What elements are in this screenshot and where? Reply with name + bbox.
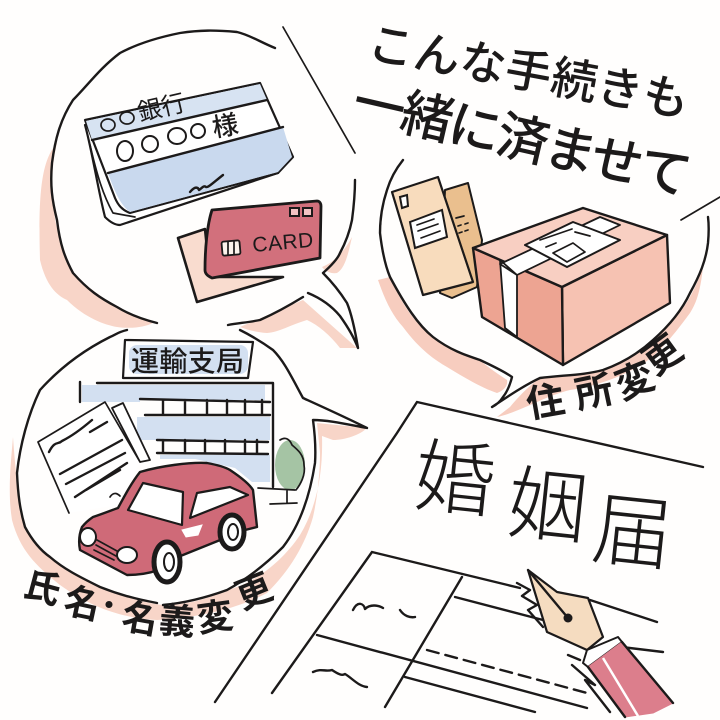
signature squiggle	[190, 175, 223, 192]
passbook lower wash	[108, 127, 292, 212]
building lines	[80, 382, 273, 487]
account holder	[117, 104, 241, 161]
tree	[258, 438, 305, 504]
passbook header band	[86, 84, 267, 140]
box tape	[500, 217, 620, 337]
dashed signature	[427, 650, 587, 693]
front card	[205, 201, 321, 278]
nib slit	[528, 570, 568, 618]
chip	[221, 240, 241, 256]
box top	[473, 208, 667, 287]
box label	[525, 222, 620, 267]
pen outline and highlight	[588, 642, 673, 717]
bank name	[101, 83, 188, 131]
form outline	[215, 402, 703, 702]
divider line top	[283, 27, 355, 153]
nib	[528, 570, 603, 650]
passbook cover	[85, 83, 293, 213]
sign wash	[129, 345, 248, 374]
form title: 婚姻届	[409, 412, 679, 588]
paper writing	[49, 420, 127, 497]
back envelope	[440, 183, 482, 298]
building washes	[82, 385, 270, 482]
title line 1: こんな手続きも	[363, 7, 695, 131]
front envelope	[392, 177, 473, 295]
passbook pages	[85, 125, 285, 225]
passbook	[85, 83, 293, 225]
foliage	[275, 440, 305, 490]
red card	[178, 201, 321, 302]
card marks	[290, 208, 312, 216]
box right side	[562, 235, 670, 365]
handwriting one	[353, 604, 415, 617]
parcel box	[473, 208, 670, 365]
door mirror	[182, 525, 202, 537]
sign	[123, 340, 253, 378]
document	[38, 402, 150, 513]
wheels	[154, 515, 244, 582]
pen hatching	[517, 583, 610, 712]
panel: marriage registration form	[215, 402, 703, 717]
windshield	[128, 483, 183, 525]
car body	[79, 463, 257, 575]
envelope label	[410, 210, 447, 248]
bubble outline	[380, 160, 709, 407]
title	[347, 7, 700, 210]
envelopes	[392, 177, 482, 298]
account holder: 様	[209, 104, 241, 145]
bubble outline	[51, 31, 358, 348]
panel: address change bubble	[378, 160, 709, 429]
paper	[38, 402, 140, 513]
bubble outline	[17, 330, 367, 605]
side window	[190, 487, 248, 518]
title line 2: 一緒に済ませて	[347, 60, 700, 210]
sign text: 運輸支局	[131, 340, 244, 380]
address change label: 住所変更	[521, 319, 692, 429]
transport office building	[38, 340, 305, 513]
bubble pink tail wash	[240, 237, 357, 348]
red car	[79, 463, 257, 582]
form table	[272, 552, 663, 712]
handwriting two	[313, 670, 367, 687]
back card	[178, 229, 283, 302]
back sheet	[112, 403, 150, 462]
pen body	[588, 642, 673, 717]
pen collar	[583, 637, 622, 667]
headlights	[80, 528, 137, 563]
envelope stamp	[400, 195, 408, 208]
bank name: 銀行	[134, 83, 188, 128]
divider line right	[681, 197, 720, 220]
bubble pink left wash	[40, 143, 153, 328]
bubble pink wash	[10, 423, 367, 620]
card label: CARD	[251, 229, 315, 257]
name change label: 氏名･名義変更	[19, 555, 280, 646]
box left side	[473, 248, 563, 365]
ground lines	[258, 488, 297, 504]
bubble pink wash	[378, 267, 703, 417]
fountain pen	[528, 570, 673, 717]
panel: bank and card speech bubble	[40, 31, 358, 348]
nib hole	[564, 614, 572, 622]
panel: name change bubble	[10, 330, 367, 646]
